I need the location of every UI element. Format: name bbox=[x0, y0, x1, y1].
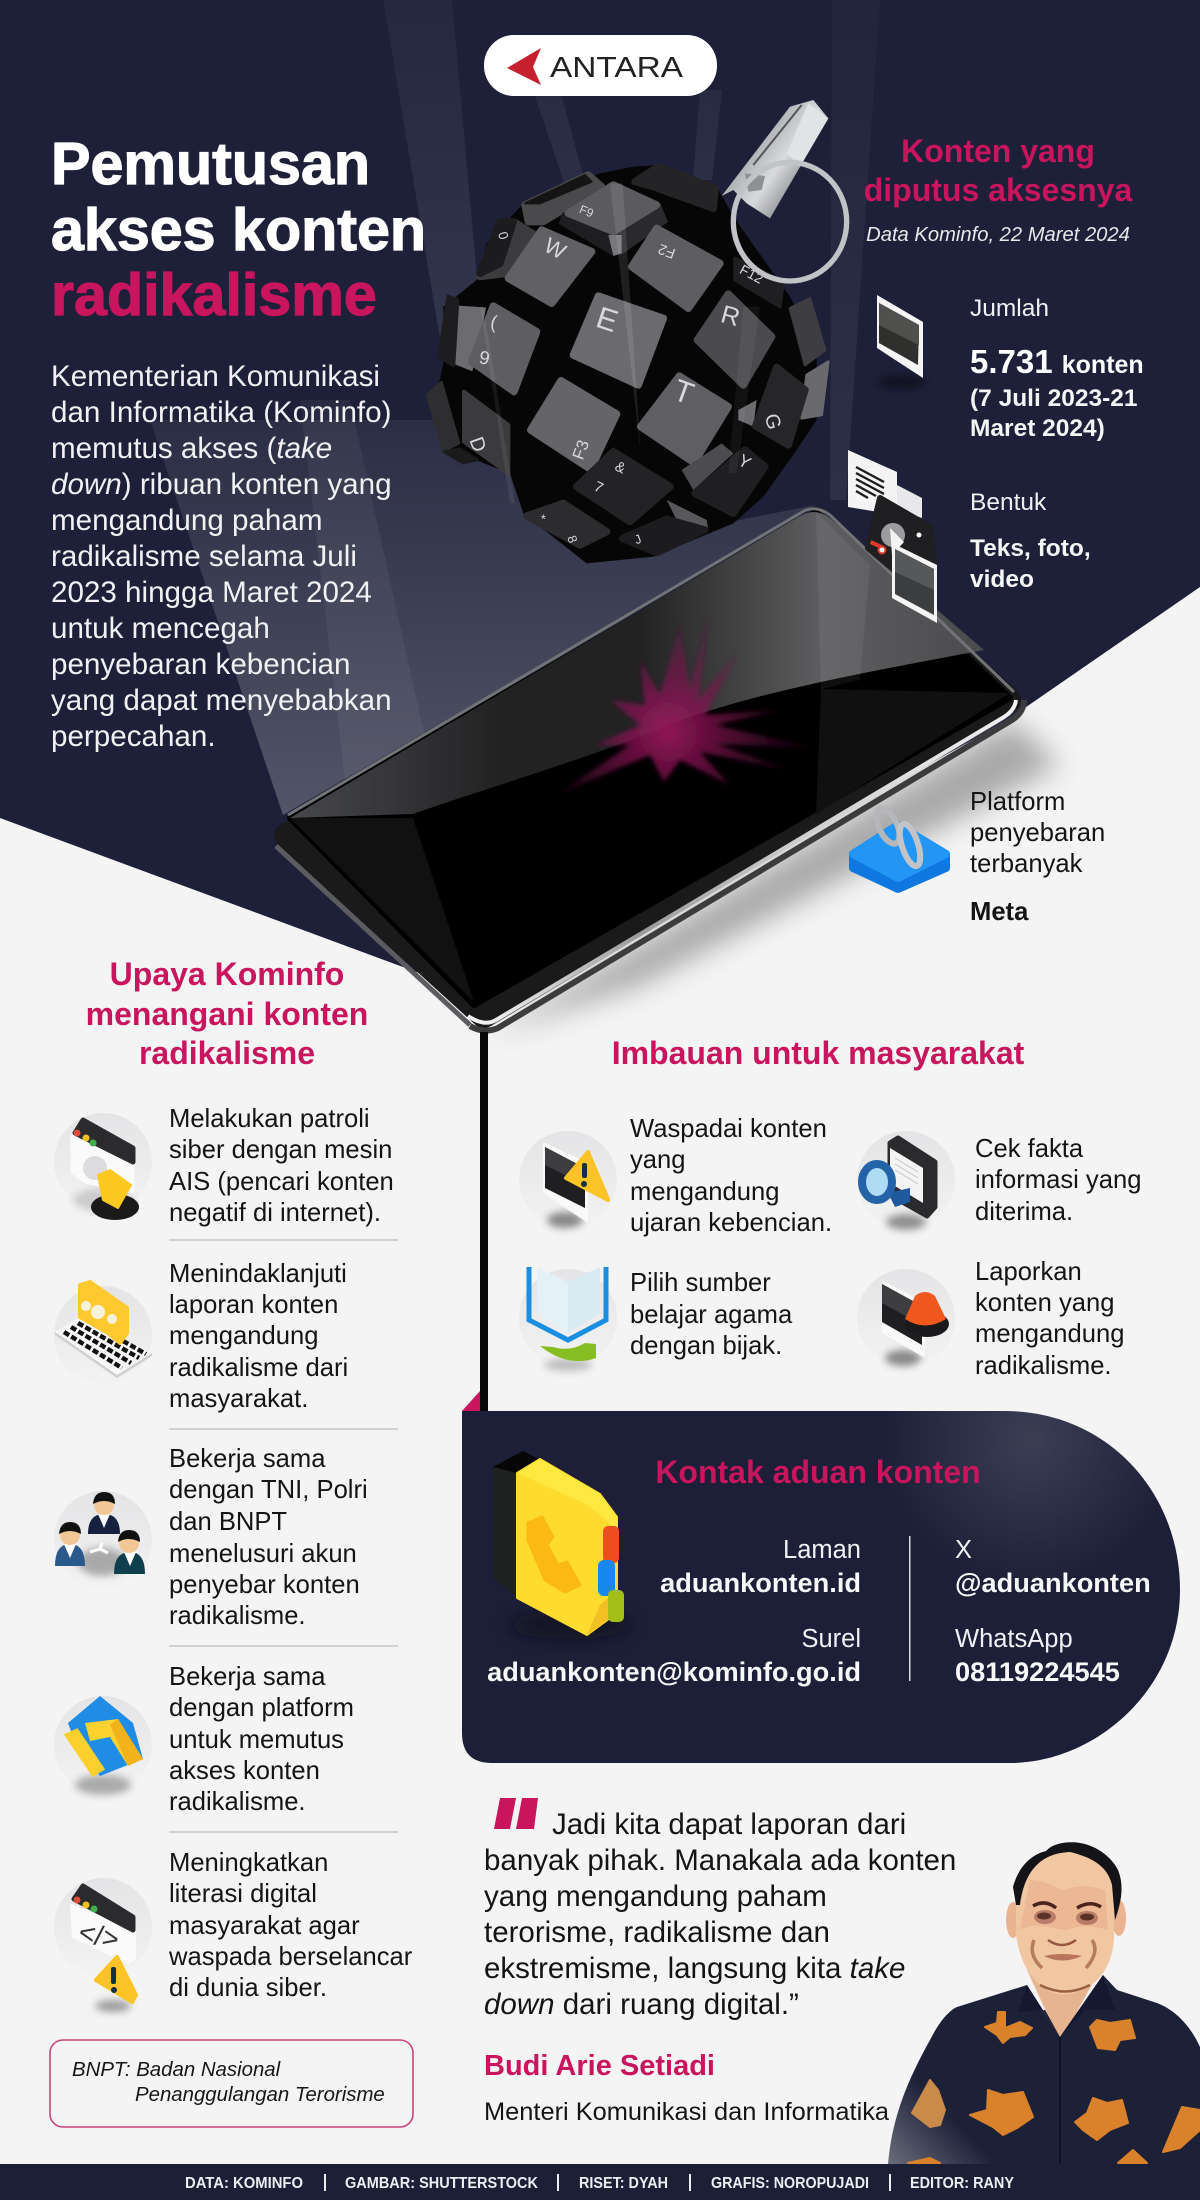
key letters: G bbox=[760, 411, 785, 432]
panel: upaya item 2: laporan konten bbox=[169, 1291, 338, 1319]
panel: upaya item 3: dan BNPT bbox=[169, 1508, 287, 1536]
key letters: ( bbox=[489, 311, 499, 333]
panel: upaya item 4: radikalisme. bbox=[169, 1788, 306, 1816]
footer credits bbox=[0, 2164, 1200, 2200]
stat: Bentuk: Bentuk bbox=[970, 489, 1047, 516]
grenade pin bbox=[722, 100, 847, 281]
stat: Platform: terbanyak bbox=[970, 850, 1083, 878]
stat: Platform bbox=[970, 788, 1105, 926]
contact: Laman: aduankonten.id bbox=[660, 1567, 861, 1598]
key letters: & bbox=[612, 459, 628, 477]
contact: Laman bbox=[660, 1536, 861, 1598]
panel: imbauan item 4 bbox=[857, 1258, 1124, 1380]
key letters: E bbox=[592, 300, 622, 339]
heading: Upaya Kominfo: radikalisme bbox=[139, 1035, 315, 1071]
heading: Konten yang diputus aksesnya: Data Kominfo, 22 Maret 2024 bbox=[866, 224, 1130, 246]
panel: upaya item 1: negatif di internet). bbox=[169, 1199, 381, 1227]
icon: photo with siren bbox=[857, 1269, 955, 1367]
logo pill bbox=[484, 35, 717, 96]
intro paragraph: yang dapat menyebabkan bbox=[51, 684, 392, 717]
crimson corner bbox=[462, 1391, 480, 1411]
icon: browser with shield bbox=[54, 1113, 152, 1220]
quote: ekstremisme, langsung kita take bbox=[484, 1952, 905, 1985]
footer credits: DATA: KOMINFO bbox=[185, 2175, 303, 2192]
icon: handshake bbox=[54, 1696, 152, 1795]
intro paragraph: mengandung paham bbox=[51, 504, 322, 537]
contact: Surel: Surel bbox=[801, 1625, 861, 1653]
vertical divider bbox=[480, 1032, 488, 1411]
panel: imbauan item 1: ujaran kebencian. bbox=[630, 1209, 832, 1237]
note box: BNPT: Penanggulangan Terorisme bbox=[135, 2084, 385, 2106]
intro paragraph: down) ribuan konten yang bbox=[51, 468, 392, 501]
contact: X bbox=[955, 1536, 1151, 1598]
key letters: 0 bbox=[495, 230, 512, 241]
panel: imbauan item 4: radikalisme. bbox=[975, 1352, 1112, 1380]
key letters bbox=[464, 202, 785, 547]
icon: open book bbox=[519, 1267, 617, 1371]
panel: upaya item 2: Menindaklanjuti bbox=[169, 1260, 347, 1288]
panel: upaya item 4: Bekerja sama bbox=[169, 1663, 326, 1691]
stat: Jumlah: Maret 2024) bbox=[970, 415, 1105, 442]
panel: imbauan item 2: Cek fakta bbox=[975, 1135, 1084, 1163]
panel: upaya item 3: dengan TNI, Polri bbox=[169, 1476, 368, 1504]
panel: upaya item 3: Bekerja sama bbox=[169, 1445, 326, 1473]
intro paragraph: Kementerian Komunikasi bbox=[51, 360, 380, 393]
icon: phone book bbox=[493, 1451, 630, 1639]
icon: quote mark bbox=[494, 1798, 538, 1829]
panel: upaya item 5: waspada berselancar bbox=[168, 1943, 413, 1971]
dark header background bbox=[0, 0, 1200, 1010]
panel: upaya item 4 bbox=[54, 1663, 354, 1816]
panel: upaya item 2: masyarakat. bbox=[169, 1385, 308, 1413]
contact: Surel: aduankonten@kominfo.go.id bbox=[487, 1656, 861, 1687]
note box: BNPT: BNPT: Badan Nasional bbox=[72, 2059, 281, 2081]
panel: upaya item 2: radikalisme dari bbox=[169, 1354, 348, 1382]
panel: imbauan item 4: konten yang bbox=[975, 1289, 1114, 1317]
contact: X: @aduankonten bbox=[955, 1567, 1151, 1598]
key letters: T bbox=[669, 373, 698, 412]
panel: upaya item 2 bbox=[54, 1260, 348, 1413]
stat: Jumlah bbox=[970, 295, 1144, 442]
panel: upaya item 2: mengandung bbox=[169, 1322, 318, 1350]
icon: Antara chevron bbox=[507, 48, 541, 85]
quote: terorisme, radikalisme dan bbox=[484, 1916, 830, 1949]
heading: Imbauan: Imbauan untuk masyarakat bbox=[612, 1035, 1025, 1071]
panel: kontak aduan bbox=[462, 1411, 1180, 1763]
heading: Konten yang diputus aksesnya: diputus aksesnya bbox=[864, 172, 1132, 208]
panel: upaya item 1: AIS (pencari konten bbox=[169, 1168, 394, 1196]
panel: imbauan item 1: mengandung bbox=[630, 1178, 779, 1206]
illustration: Budi Arie Setiadi portrait bbox=[888, 1842, 1200, 2164]
panel: upaya item 3: penyebar konten bbox=[169, 1571, 360, 1599]
icon: photo with warning bbox=[519, 1131, 617, 1229]
panel: imbauan item 4: mengandung bbox=[975, 1320, 1124, 1348]
key letters: 9 bbox=[478, 346, 491, 369]
panel: imbauan item 4: Laporkan bbox=[975, 1258, 1082, 1286]
panel: imbauan item 3: Pilih sumber bbox=[630, 1269, 771, 1297]
stat: Platform: Platform bbox=[970, 788, 1065, 816]
panel: imbauan item 3 bbox=[519, 1267, 793, 1371]
quote: banyak pihak. Manakala ada konten bbox=[484, 1844, 956, 1877]
pink burst on screen bbox=[556, 611, 816, 795]
speaker: Menteri Komunikasi dan Informatika bbox=[484, 2098, 890, 2126]
contact: WhatsApp: 08119224545 bbox=[955, 1656, 1120, 1687]
title bbox=[51, 130, 426, 328]
footer credits: GAMBAR: SHUTTERSTOCK bbox=[345, 2175, 538, 2192]
note box: BNPT bbox=[50, 2040, 413, 2127]
key letters: R bbox=[718, 300, 743, 332]
stat: Jumlah: (7 Juli 2023-21 bbox=[970, 385, 1138, 412]
panel: upaya item 1: Melakukan patroli bbox=[169, 1105, 370, 1133]
quote: Jadi kita dapat laporan dari bbox=[552, 1808, 906, 1841]
key letters: F9 bbox=[577, 202, 596, 221]
heading: Konten yang diputus aksesnya bbox=[864, 133, 1132, 246]
panel: upaya item 3: radikalisme. bbox=[169, 1602, 306, 1630]
stat: Platform: penyebaran bbox=[970, 819, 1105, 847]
panel: imbauan item 3: belajar agama bbox=[630, 1301, 793, 1329]
heading: Konten yang diputus aksesnya: Konten yang bbox=[901, 133, 1095, 169]
icon: browser code with warning bbox=[54, 1878, 152, 2012]
intro paragraph bbox=[51, 360, 392, 753]
contact: X: X bbox=[955, 1536, 972, 1564]
quote: down dari ruang digital.” bbox=[484, 1988, 799, 2021]
key letters: Y bbox=[735, 450, 755, 473]
panel: upaya item 5: di dunia siber. bbox=[169, 1974, 327, 2002]
panel: upaya item 4: untuk memutus bbox=[169, 1726, 344, 1754]
contact: WhatsApp bbox=[955, 1625, 1120, 1687]
stat: Bentuk: video bbox=[970, 566, 1034, 593]
footer credits: EDITOR: RANY bbox=[910, 2175, 1015, 2192]
panel: imbauan item 2 bbox=[857, 1131, 1141, 1230]
stat: Jumlah: Jumlah bbox=[970, 295, 1049, 322]
intro paragraph: dan Informatika (Kominfo) bbox=[51, 396, 391, 429]
icon: Meta bbox=[853, 805, 946, 889]
panel: upaya item 4: akses konten bbox=[169, 1757, 320, 1785]
panel: imbauan item 1: yang bbox=[630, 1146, 686, 1174]
speaker bbox=[484, 2050, 890, 2126]
panel: upaya item 4: dengan platform bbox=[169, 1694, 354, 1722]
stat: Platform: Meta bbox=[970, 898, 1029, 926]
panel: upaya item 5: literasi digital bbox=[169, 1880, 317, 1908]
panel: upaya item 5: masyarakat agar bbox=[169, 1912, 360, 1940]
key letters: W bbox=[540, 232, 570, 264]
panel: upaya item 1: siber dengan mesin bbox=[169, 1136, 392, 1164]
icon: text, photo, video bbox=[848, 450, 937, 623]
intro paragraph: radikalisme selama Juli bbox=[51, 540, 357, 573]
panel: imbauan item 1: Waspadai konten bbox=[630, 1115, 827, 1143]
panel: upaya item 5 bbox=[54, 1849, 413, 2012]
heading: Upaya Kominfo bbox=[86, 956, 368, 1071]
title: Pemutusan bbox=[51, 130, 370, 197]
stat: Jumlah: 5.731 konten bbox=[970, 343, 1144, 380]
panel: imbauan item 2: diterima. bbox=[975, 1198, 1073, 1226]
intro paragraph: perpecahan. bbox=[51, 720, 216, 753]
heading: Upaya Kominfo: Upaya Kominfo bbox=[110, 956, 344, 992]
panel: upaya item 3: menelusuri akun bbox=[169, 1540, 357, 1568]
illustration: keyboard grenade bbox=[427, 100, 847, 563]
contact: WhatsApp: WhatsApp bbox=[955, 1625, 1073, 1653]
icon: magnifier and document bbox=[857, 1131, 955, 1230]
stat: Bentuk: Teks, foto, bbox=[970, 535, 1091, 562]
footer credits: GRAFIS: NOROPUJADI bbox=[711, 2175, 869, 2192]
illustration: smartphone bbox=[276, 509, 1024, 1031]
key letters: J bbox=[633, 532, 643, 547]
key letters: 7 bbox=[591, 479, 605, 497]
key letters: F3 bbox=[569, 437, 593, 462]
key letters: D bbox=[464, 434, 490, 455]
contact: Surel bbox=[487, 1625, 861, 1687]
footer credits: RISET: DYAH bbox=[579, 2175, 668, 2192]
icon: chat and keyboard bbox=[54, 1282, 152, 1384]
panel: upaya item 1 bbox=[54, 1105, 394, 1227]
panel: upaya item 5: Meningkatkan bbox=[169, 1849, 328, 1877]
intro paragraph: memutus akses (take bbox=[51, 432, 332, 465]
intro paragraph: 2023 hingga Maret 2024 bbox=[51, 576, 372, 609]
contact: Laman: Laman bbox=[783, 1536, 861, 1564]
intro paragraph: penyebaran kebencian bbox=[51, 648, 350, 681]
title: akses konten bbox=[51, 196, 426, 263]
key letters: * bbox=[541, 512, 546, 526]
heading: Upaya Kominfo: menangani konten bbox=[86, 996, 368, 1032]
panel: upaya item 3 bbox=[54, 1445, 368, 1630]
panel: imbauan item 3: dengan bijak. bbox=[630, 1332, 782, 1360]
light rays bbox=[150, 0, 880, 815]
shirt pattern bbox=[908, 2012, 1200, 2163]
quote bbox=[484, 1798, 956, 2021]
stat: Bentuk bbox=[970, 489, 1091, 593]
logo pill: ANTARA bbox=[550, 52, 684, 84]
phone shadow bbox=[490, 720, 1060, 1034]
intro paragraph: untuk mencegah bbox=[51, 612, 270, 645]
icon: three people bbox=[54, 1491, 152, 1589]
keyboard keys bbox=[427, 167, 828, 553]
icon: photo frame bbox=[877, 295, 926, 389]
speaker: Budi Arie Setiadi bbox=[484, 2050, 715, 2082]
key letters: F2 bbox=[656, 240, 678, 261]
key letters: F12 bbox=[737, 261, 766, 287]
quote: yang mengandung paham bbox=[484, 1880, 827, 1913]
title: radikalisme bbox=[51, 261, 377, 328]
panel: imbauan item 2: informasi yang bbox=[975, 1166, 1141, 1194]
icon: browser code with warning: </> bbox=[76, 1916, 122, 1955]
panel: imbauan item 1 bbox=[519, 1115, 832, 1237]
panel: kontak aduan: Kontak aduan konten bbox=[655, 1454, 981, 1490]
key letters: 8 bbox=[564, 534, 580, 545]
